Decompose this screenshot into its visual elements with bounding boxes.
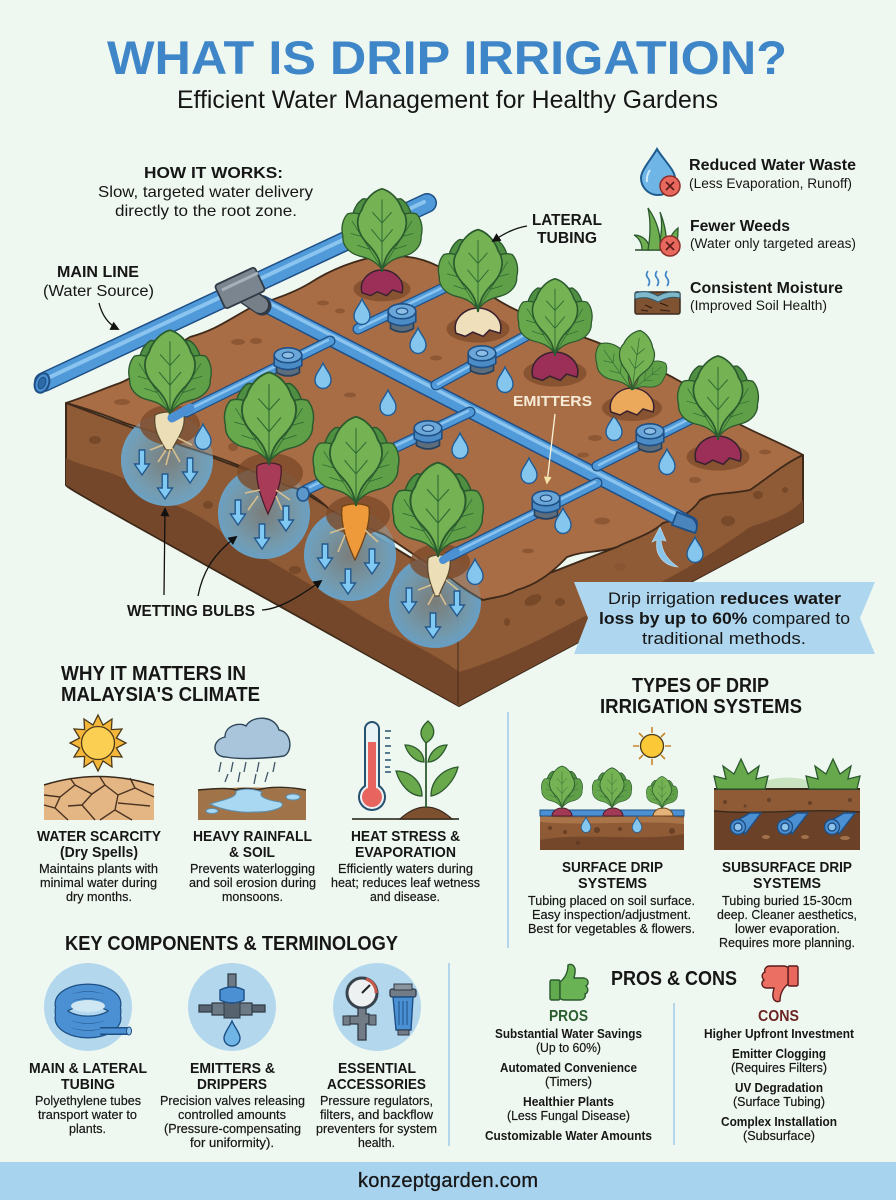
title: WHAT IS DRIP IRRIGATION? <box>107 31 787 84</box>
cons column: (Subsurface) <box>743 1128 815 1143</box>
main diagram: soil bed with irrigation <box>32 189 803 706</box>
pros column: Healthier Plants <box>523 1094 614 1109</box>
panel: types of drip irrigation <box>508 675 860 950</box>
card text: heat stress: heat; reduces leaf wetness <box>331 875 480 890</box>
card text: water scarcity: WATER SCARCITY <box>37 828 161 845</box>
card text: subsurface drip: Requires more planning. <box>719 935 855 950</box>
icon: tubing coil <box>44 963 132 1051</box>
label: wetting bulbs: WETTING BULBS <box>127 603 255 620</box>
label: emitters <box>513 393 592 483</box>
emitters <box>274 304 664 519</box>
label: main line: MAIN LINE <box>57 264 139 281</box>
card text: accessories: Pressure regulators, <box>320 1093 433 1108</box>
planting holes at front <box>140 405 470 580</box>
plant: small orange root <box>586 328 674 421</box>
card text: accessories: preventers for system <box>316 1121 437 1136</box>
main line pipe <box>32 202 427 395</box>
icon: thermometer and plant <box>352 721 459 819</box>
soil surface spots <box>114 300 771 571</box>
card text: heavy rainfall: HEAVY RAINFALL <box>193 828 312 845</box>
cons column <box>704 1008 855 1143</box>
card text: emitters: Precision valves releasing <box>160 1093 305 1108</box>
plant: second beet <box>508 279 602 387</box>
card text: subsurface drip: SYSTEMS <box>753 875 821 892</box>
benefit: fewer weeds: Fewer Weeds <box>690 218 790 235</box>
callout ribbon: loss by up to 60% compared to <box>599 609 850 628</box>
pros column: (Up to 60%) <box>536 1040 601 1055</box>
icon: thumbs up <box>550 964 588 1000</box>
cons column: (Requires Filters) <box>731 1060 827 1075</box>
card text: surface drip: Tubing placed on soil surface. <box>528 893 695 908</box>
cons column: Emitter Clogging <box>732 1046 826 1061</box>
heading: PROS & CONS <box>611 968 737 990</box>
card text: subsurface drip: deep. Cleaner aesthetics, <box>717 907 857 922</box>
card text: accessories <box>316 1060 437 1150</box>
heading: IRRIGATION SYSTEMS <box>600 696 802 718</box>
label: lateral tubing: LATERAL <box>532 212 602 229</box>
card text: water scarcity: minimal water during <box>40 875 157 890</box>
card text: heat stress: and disease. <box>370 889 440 904</box>
card text: tubing: MAIN & LATERAL <box>29 1060 147 1077</box>
lateral tubing A <box>186 284 450 412</box>
lateral tubing C <box>450 411 705 556</box>
icon: consistent moisture <box>635 271 680 314</box>
plant: front cream root <box>118 330 222 465</box>
card text: subsurface drip: lower evaporation. <box>735 921 840 936</box>
divider <box>673 1003 675 1145</box>
card text: emitters: for uniformity). <box>190 1135 274 1150</box>
pros column <box>485 1008 652 1143</box>
tee connector <box>215 267 265 309</box>
card text: heavy rainfall <box>189 828 316 904</box>
card text: water scarcity <box>37 828 161 904</box>
plant: back beet <box>331 189 433 301</box>
card text: heat stress: HEAT STRESS & <box>351 828 460 845</box>
benefit: fewer weeds <box>690 218 856 251</box>
card text: subsurface drip <box>717 859 857 950</box>
benefit: consistent moisture <box>690 280 843 313</box>
card text: accessories: ESSENTIAL <box>338 1060 416 1077</box>
footer band: konzeptgarden.com <box>358 1170 538 1192</box>
heading: WHY IT MATTERS IN <box>61 663 246 685</box>
divider <box>507 712 509 948</box>
card text: water scarcity: dry months. <box>66 889 132 904</box>
card text: accessories: filters, and backflow <box>320 1107 434 1122</box>
illustration: subsurface drip <box>714 759 860 850</box>
cons column: (Surface Tubing) <box>733 1094 825 1109</box>
footer band <box>0 1162 896 1200</box>
soil front corner line <box>457 605 459 704</box>
pros column: (Less Fungal Disease) <box>507 1108 630 1123</box>
soil top surface <box>66 255 803 600</box>
plant: cream turnip <box>428 230 528 343</box>
card text: heat stress: Efficiently waters during <box>338 861 473 876</box>
card text: subsurface drip: SUBSURFACE DRIP <box>722 859 852 876</box>
plant: front red root <box>213 372 325 514</box>
icon: emitter dripper <box>188 963 276 1051</box>
card text: tubing <box>29 1060 147 1136</box>
plant: right beet <box>667 356 769 471</box>
card text: heavy rainfall: Prevents waterlogging <box>190 861 315 876</box>
plant: front right root <box>381 463 495 605</box>
pros column: Customizable Water Amounts <box>485 1128 652 1143</box>
divider <box>448 963 450 1146</box>
icon: reduced water waste <box>641 149 680 196</box>
card text: heavy rainfall: and soil erosion during <box>189 875 316 890</box>
card text: emitters <box>160 1060 305 1150</box>
return flow arrow <box>652 527 678 567</box>
subtitle: Efficient Water Management for Healthy Gardens <box>177 86 718 114</box>
card text: accessories: ACCESSORIES <box>327 1076 426 1093</box>
icon: fewer weeds <box>634 208 680 256</box>
callout ribbon: traditional methods. <box>642 629 806 648</box>
water drops <box>195 299 703 584</box>
benefit: reduced water waste <box>689 157 856 191</box>
benefit: reduced water waste: (Less Evaporation, Runoff) <box>689 176 852 191</box>
heading: MALAYSIA'S CLIMATE <box>61 684 260 706</box>
wetting bulb tint on surface <box>121 414 481 648</box>
heading: TYPES OF DRIP <box>632 675 769 697</box>
callout ribbon: Drip irrigation reduces water <box>608 589 841 608</box>
card text: heavy rainfall: monsoons. <box>222 889 283 904</box>
main distribution branch <box>262 301 697 533</box>
benefit: fewer weeds: (Water only targeted areas) <box>690 236 856 251</box>
card text: emitters: DRIPPERS <box>197 1076 267 1093</box>
illustration: surface drip <box>536 766 684 850</box>
label: emitters: EMITTERS <box>513 393 592 410</box>
panel: why it matters <box>37 663 480 904</box>
pros column: (Timers) <box>545 1074 592 1089</box>
soil lower dark band <box>66 458 803 706</box>
card text: heavy rainfall: & SOIL <box>229 844 275 861</box>
card text: surface drip: Easy inspection/adjustment. <box>532 907 691 922</box>
benefit: consistent moisture: Consistent Moisture <box>690 280 843 297</box>
heading <box>600 675 802 718</box>
card text: subsurface drip: Tubing buried 15-30cm <box>722 893 852 908</box>
heading: KEY COMPONENTS & TERMINOLOGY <box>65 933 399 955</box>
heading <box>61 663 260 706</box>
card text: emitters: controlled amounts <box>178 1107 286 1122</box>
icon: sun over cracked earth <box>44 715 154 820</box>
plant: front carrot <box>302 417 410 560</box>
how it works text: HOW IT WORKS: <box>144 165 283 182</box>
icon: thumbs down <box>762 966 798 1002</box>
callout ribbon <box>574 582 875 654</box>
benefit: consistent moisture: (Improved Soil Health) <box>690 298 827 313</box>
how it works text: directly to the root zone. <box>115 203 297 220</box>
lateral tubing B <box>297 330 535 501</box>
icon: rain cloud over puddle <box>198 718 306 820</box>
label: main line: (Water Source) <box>43 283 154 300</box>
card text: heat stress: EVAPORATION <box>355 844 456 861</box>
card text: water scarcity: Maintains plants with <box>39 861 158 876</box>
pros column: Automated Convenience <box>500 1060 637 1075</box>
cons column: Complex Installation <box>721 1114 837 1129</box>
label: lateral tubing: TUBING <box>537 230 597 247</box>
soil front faces <box>66 403 803 706</box>
panel: pros and cons <box>449 963 855 1146</box>
card text: tubing: TUBING <box>61 1076 115 1093</box>
benefit: reduced water waste: Reduced Water Waste <box>689 157 856 174</box>
soil spots <box>89 436 788 626</box>
panel: key components <box>29 933 437 1150</box>
card text: emitters: EMITTERS & <box>190 1060 275 1077</box>
card text: surface drip <box>528 859 695 936</box>
icon: sun with rays <box>633 727 671 765</box>
card text: tubing: Polyethylene tubes <box>35 1093 141 1108</box>
pros column: Substantial Water Savings <box>495 1026 642 1041</box>
card text: surface drip: SYSTEMS <box>578 875 647 892</box>
card text: heat stress <box>331 828 480 904</box>
benefits list <box>634 149 856 314</box>
cons column: UV Degradation <box>735 1080 823 1095</box>
card text: surface drip: SURFACE DRIP <box>562 859 663 876</box>
card text: accessories: health. <box>358 1135 395 1150</box>
wetting bulb fills on front face <box>121 414 481 648</box>
icon: pressure gauge and filter <box>333 963 421 1051</box>
pros column: PROS <box>549 1008 588 1025</box>
label: lateral tubing <box>493 212 602 247</box>
label: wetting bulbs <box>127 509 321 620</box>
card text: surface drip: Best for vegetables & flowers. <box>528 921 695 936</box>
label: main line <box>43 264 154 329</box>
card text: tubing: plants. <box>69 1121 106 1136</box>
cons column: Higher Upfront Investment <box>704 1026 855 1041</box>
how it works text: Slow, targeted water delivery <box>98 184 313 201</box>
front lateral end and emitter tip <box>172 408 456 560</box>
card text: tubing: transport water to <box>38 1107 137 1122</box>
how it works text <box>98 165 313 220</box>
card text: emitters: (Pressure-compensating <box>164 1121 301 1136</box>
cons column: CONS <box>758 1008 799 1025</box>
downward flow arrows <box>134 450 464 638</box>
card text: water scarcity: (Dry Spells) <box>60 844 138 861</box>
